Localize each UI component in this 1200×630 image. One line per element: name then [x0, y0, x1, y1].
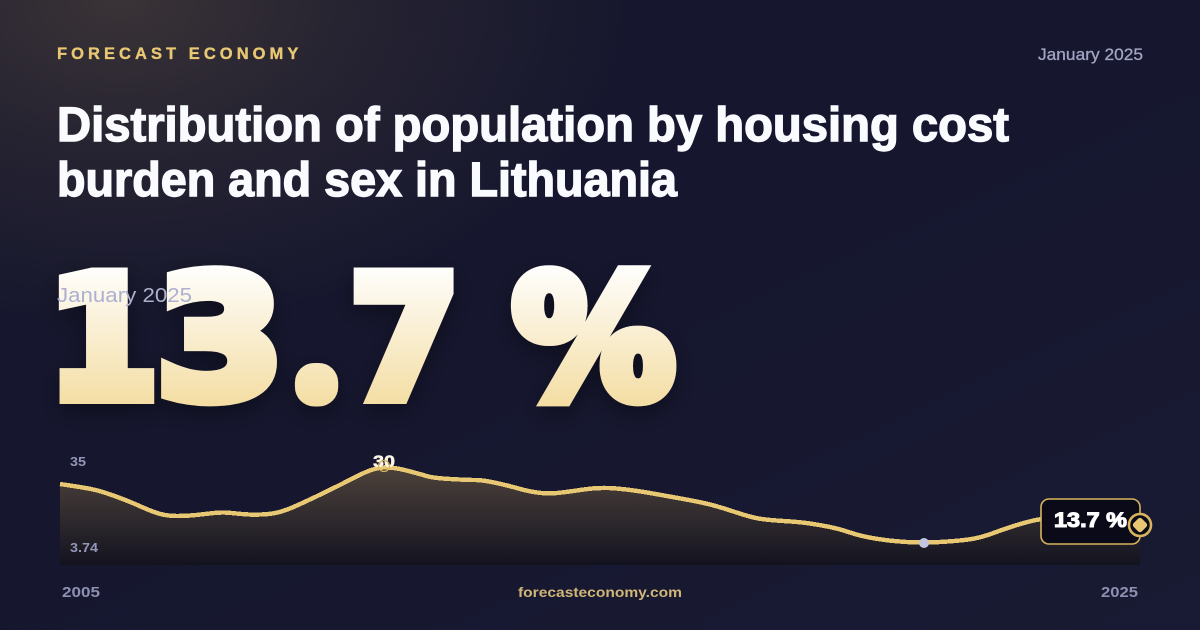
big value: .: [312, 365, 321, 393]
site url: forecasteconomy.com: [518, 584, 682, 600]
title: Distribution of population by housing cost: [57, 99, 1009, 152]
big value: [48, 241, 675, 437]
axis min label: 3.74: [70, 540, 99, 555]
end marker: [1129, 514, 1151, 536]
date overlay on value: January 2025: [57, 285, 192, 307]
title: [57, 99, 1009, 207]
peak label: 30: [373, 452, 395, 471]
big value: 1: [48, 241, 159, 437]
kicker: FORECAST ECONOMY: [57, 45, 302, 63]
area chart: [60, 467, 1140, 565]
trend line: [60, 467, 1060, 542]
callout: 13.7 %: [1054, 509, 1127, 532]
big value: %: [512, 241, 675, 437]
peak marker: [378, 460, 390, 472]
end year: 2025: [1101, 585, 1138, 601]
area fill: [60, 467, 1140, 565]
minimum marker: [919, 538, 929, 548]
callout: [1041, 499, 1140, 544]
title: burden and sex in Lithuania: [57, 154, 677, 207]
big value: 7: [350, 242, 460, 437]
start year: 2005: [62, 585, 100, 601]
big value: 3: [157, 242, 284, 437]
axis max label: 35: [70, 454, 86, 469]
date top right: January 2025: [1038, 46, 1143, 64]
